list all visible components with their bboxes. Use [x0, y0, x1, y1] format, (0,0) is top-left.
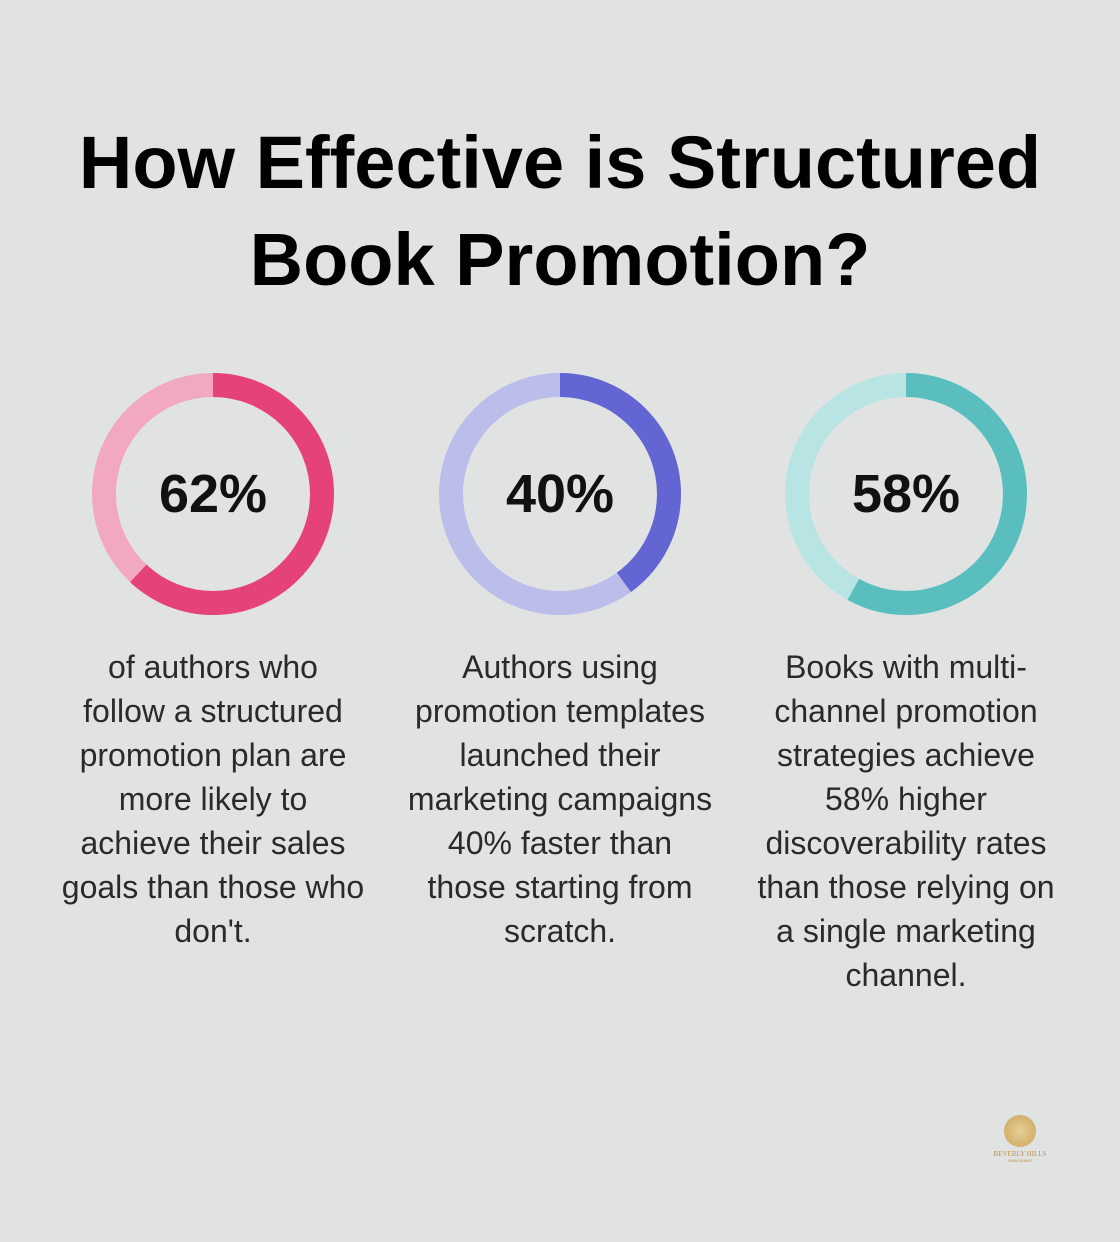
donut: 62% [92, 373, 334, 615]
text: stat 3: channel. [846, 957, 966, 993]
title: How Effective is Structured [79, 121, 1041, 204]
text: stat 2 [408, 649, 712, 949]
text: stat 2: marketing campaigns [408, 781, 712, 817]
text: stat 2: launched their [459, 737, 661, 773]
text: stat 2: promotion templates [415, 693, 705, 729]
text: stat 3: a single marketing [776, 913, 1036, 949]
text: stat 1 [62, 649, 364, 949]
text: stat 1: more likely to [119, 781, 307, 817]
donut: 58% [785, 373, 1027, 615]
donut: 62%: 62% [159, 464, 267, 524]
text: stat 3: discoverability rates [766, 825, 1046, 861]
text: stat 2: those starting from [428, 869, 692, 905]
text: stat 3: channel promotion [774, 693, 1038, 729]
title: Book Promotion? [250, 218, 870, 301]
text: stat 1: of authors who [108, 649, 318, 685]
text: stat 1: achieve their sales [80, 825, 346, 861]
text: stat 1: goals than those who [62, 869, 364, 905]
text: stat 3: strategies achieve [777, 737, 1035, 773]
text: stat 3 [757, 649, 1055, 993]
text: stat 1: don't. [174, 913, 252, 949]
text: stat 2: Authors using [462, 649, 658, 685]
donut: 40%: 40% [506, 464, 614, 524]
title [79, 121, 1041, 301]
text: stat 2: 40% faster than [448, 825, 672, 861]
text: stat 1: promotion plan are [80, 737, 346, 773]
logo [994, 1115, 1046, 1163]
donut: 58%: 58% [852, 464, 960, 524]
logo: PUBLISHING [1008, 1158, 1032, 1163]
text: stat 3: 58% higher [825, 781, 987, 817]
text: stat 1: follow a structured [83, 693, 343, 729]
text: stat 3: than those relying on [757, 869, 1055, 905]
donut: 40% [439, 373, 681, 615]
logo: BEVERLY HILLS [994, 1150, 1046, 1158]
text: stat 2: scratch. [504, 913, 616, 949]
text: stat 3: Books with multi- [785, 649, 1027, 685]
